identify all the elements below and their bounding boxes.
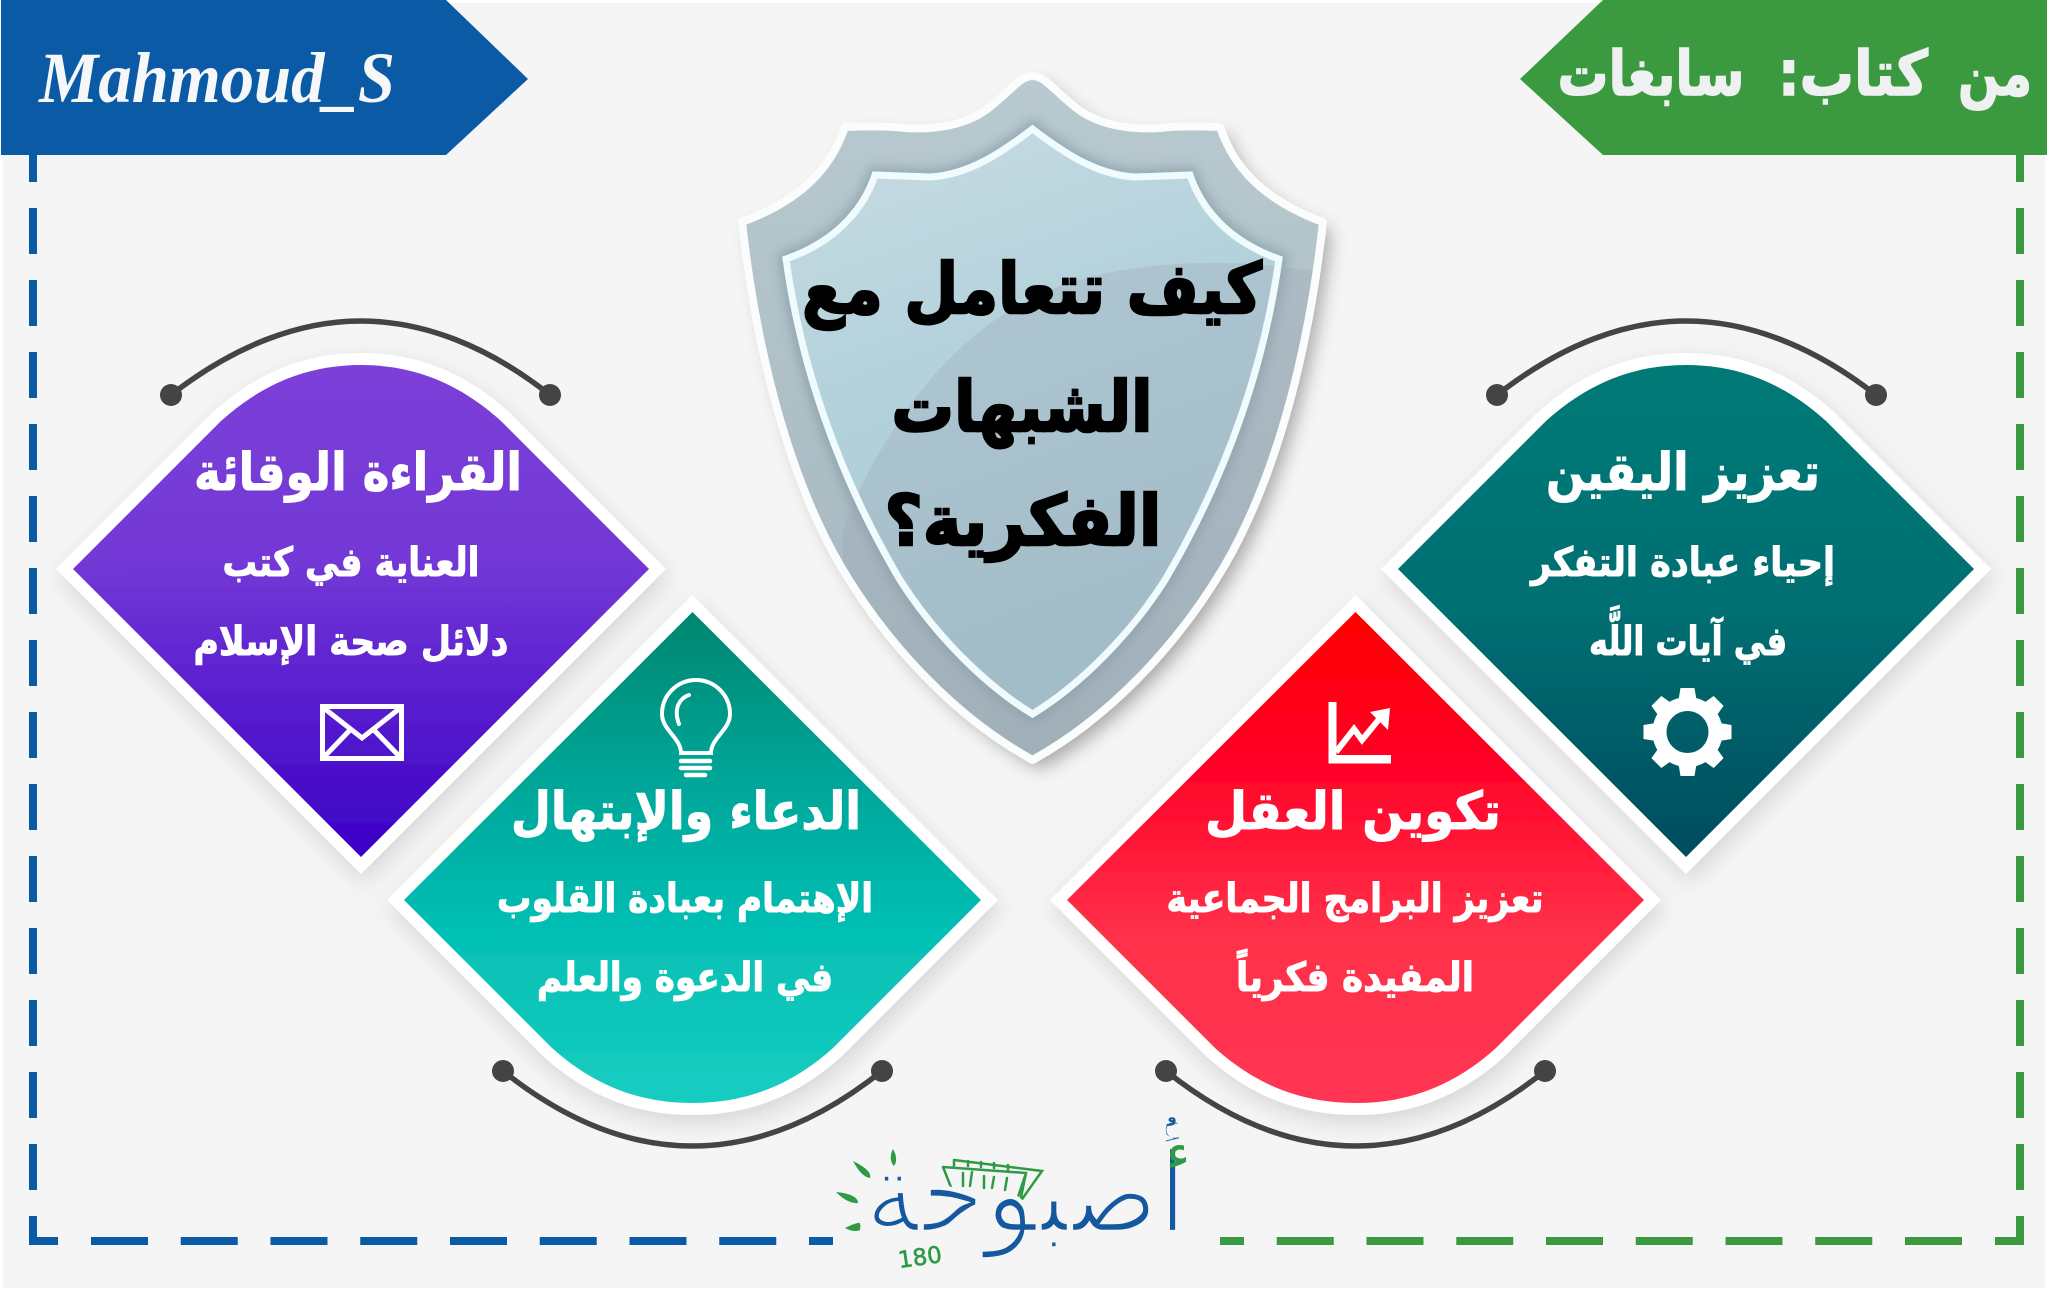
- icon: rising chart: [1328, 702, 1391, 764]
- panel: red, building the mind: [1067, 612, 1644, 1146]
- body text: [1529, 540, 1835, 665]
- banner: book source: [1520, 0, 2047, 155]
- shield with title: [742, 76, 1323, 770]
- body text: [1166, 876, 1544, 1001]
- diamond shape: [73, 365, 649, 857]
- diamond shape: [1398, 365, 1974, 857]
- shield outer body: [742, 76, 1323, 760]
- title: كيف تتعامل مع: [802, 248, 1262, 330]
- heading: تكوين العقل: [1205, 782, 1501, 842]
- dashed frame: green: [1220, 136, 2024, 1245]
- panel: dark teal, strengthening certainty: [1398, 321, 1974, 857]
- logo small mark: و: [1166, 1108, 1177, 1126]
- arc connector: [492, 1060, 893, 1146]
- body text: [497, 876, 873, 1001]
- body text: في الدعوة والعلم: [537, 955, 833, 1001]
- logo wordmark: أصبوحة: [865, 1120, 1187, 1260]
- logo: Osbuha 180: [836, 1108, 1190, 1274]
- banner: book source: كتاب:: [1778, 37, 1929, 110]
- heading: القراءة الوقائة: [194, 443, 522, 503]
- icon: envelope: [322, 706, 402, 758]
- arc connector: [1486, 321, 1887, 406]
- banner: author: [1, 0, 528, 155]
- logo book: [943, 1160, 1042, 1202]
- body text: الإهتمام بعبادة القلوب: [497, 876, 873, 922]
- body text: في آيات اللَّه: [1589, 605, 1787, 665]
- banner: book source: سابغات: [1558, 37, 1744, 110]
- shield inner face: [786, 129, 1323, 770]
- body text: [194, 540, 508, 665]
- title: الشبهات: [892, 366, 1152, 448]
- icon: light bulb: [662, 680, 730, 775]
- body text: تعزيز البرامج الجماعية: [1166, 876, 1544, 922]
- panel: green, supplication: [404, 612, 981, 1146]
- diamond shape: [1067, 612, 1644, 1103]
- icon: gear: [1644, 688, 1732, 776]
- title: الفكرية؟: [884, 480, 1162, 562]
- logo hamza: ء: [1166, 1123, 1190, 1183]
- diamond shape: [404, 612, 981, 1103]
- panel: purple, preventive reading: [73, 321, 649, 857]
- logo leaves: [836, 1149, 896, 1231]
- dashed frame: blue: [29, 136, 833, 1245]
- body text: العناية في كتب: [222, 540, 480, 586]
- heading: تعزيز اليقين: [1546, 443, 1820, 503]
- shield outer outline: [742, 76, 1323, 760]
- body text: المفيدة فكرياً: [1236, 948, 1474, 1001]
- logo number: 180: [896, 1242, 944, 1274]
- body text: دلائل صحة الإسلام: [194, 619, 508, 665]
- arc connector: [160, 321, 561, 406]
- banner: author: Mahmoud_S: [38, 38, 395, 118]
- arc connector: [1155, 1060, 1556, 1146]
- body text: إحياء عبادة التفكر: [1529, 540, 1835, 586]
- title: [802, 248, 1262, 562]
- heading: الدعاء والإبتهال: [511, 782, 861, 842]
